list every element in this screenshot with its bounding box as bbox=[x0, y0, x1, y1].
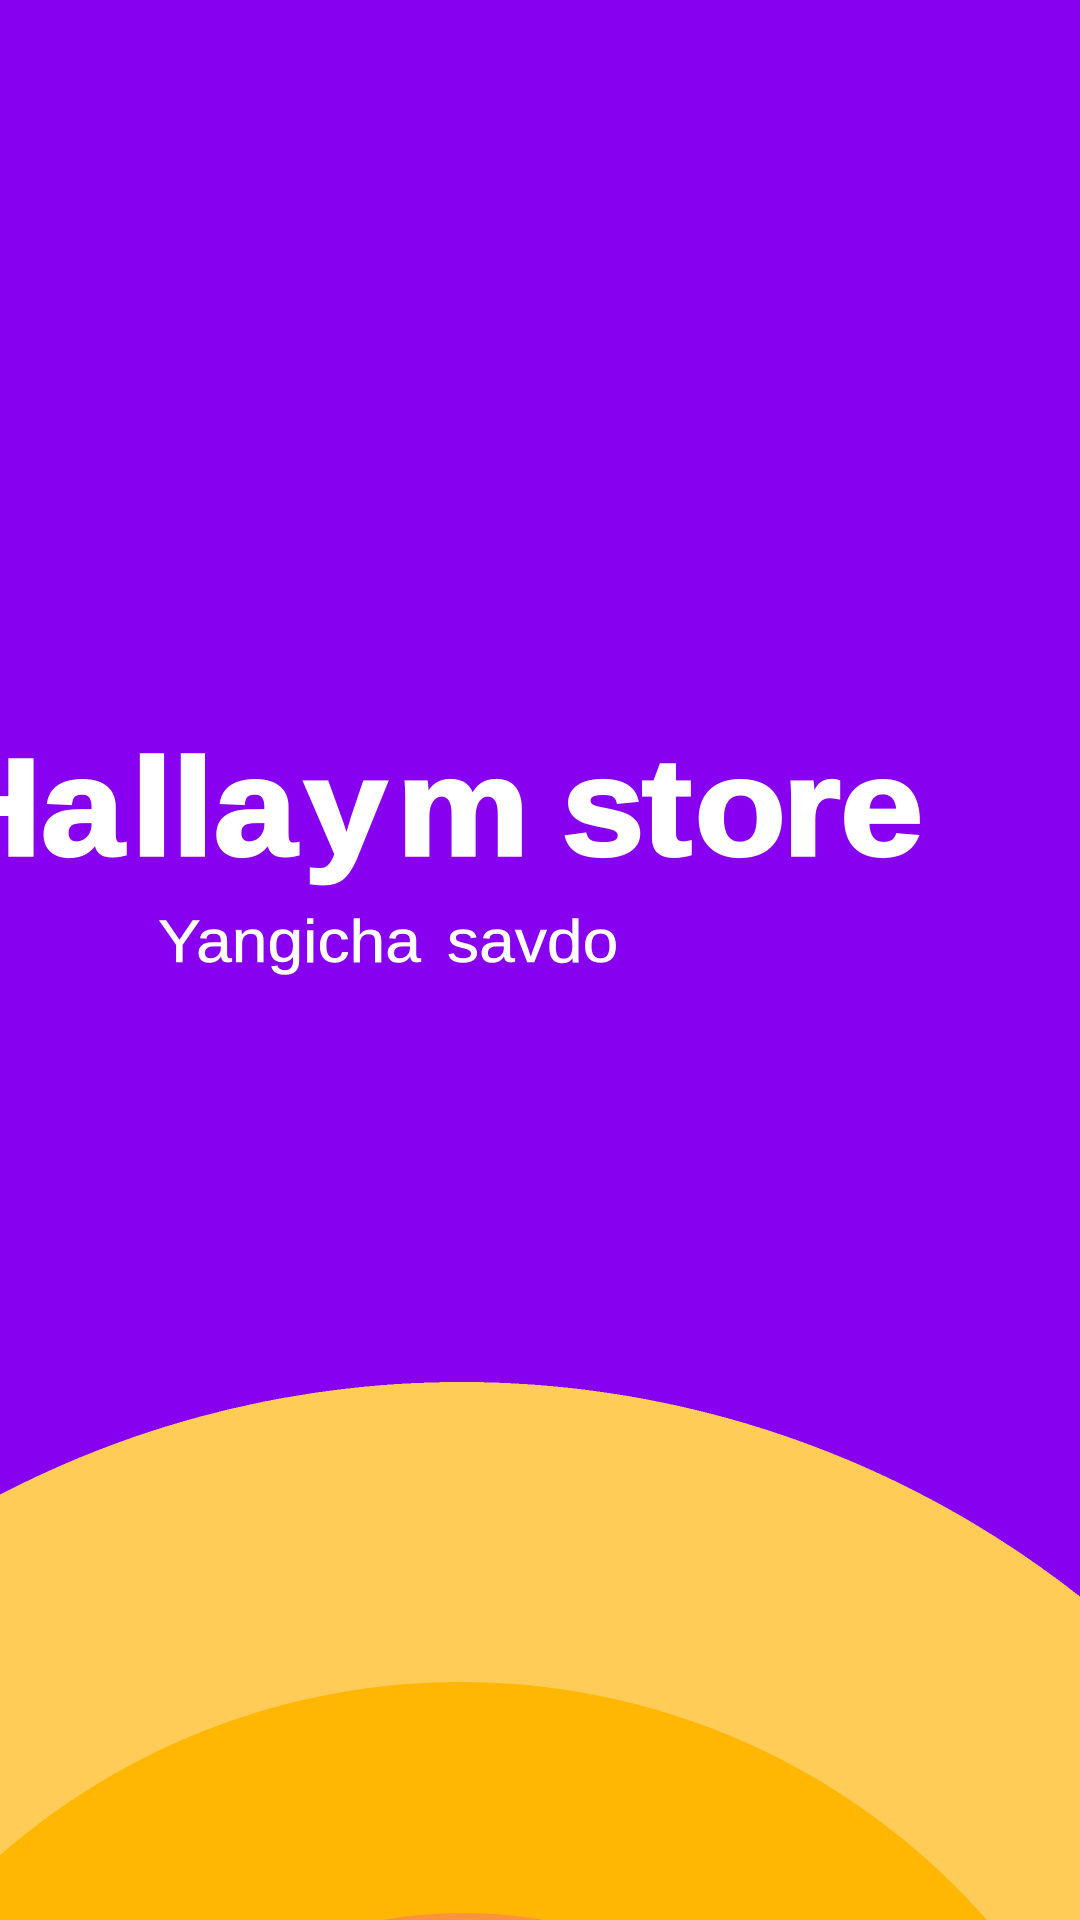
concentric circles bbox=[0, 1382, 1080, 1920]
middle circle bbox=[0, 1682, 987, 1920]
inner circle bbox=[382, 1913, 544, 1920]
subtitle: Yangicha bbox=[158, 909, 421, 976]
subtitle: savdo bbox=[447, 909, 618, 976]
outer circle bbox=[0, 1382, 1080, 1920]
